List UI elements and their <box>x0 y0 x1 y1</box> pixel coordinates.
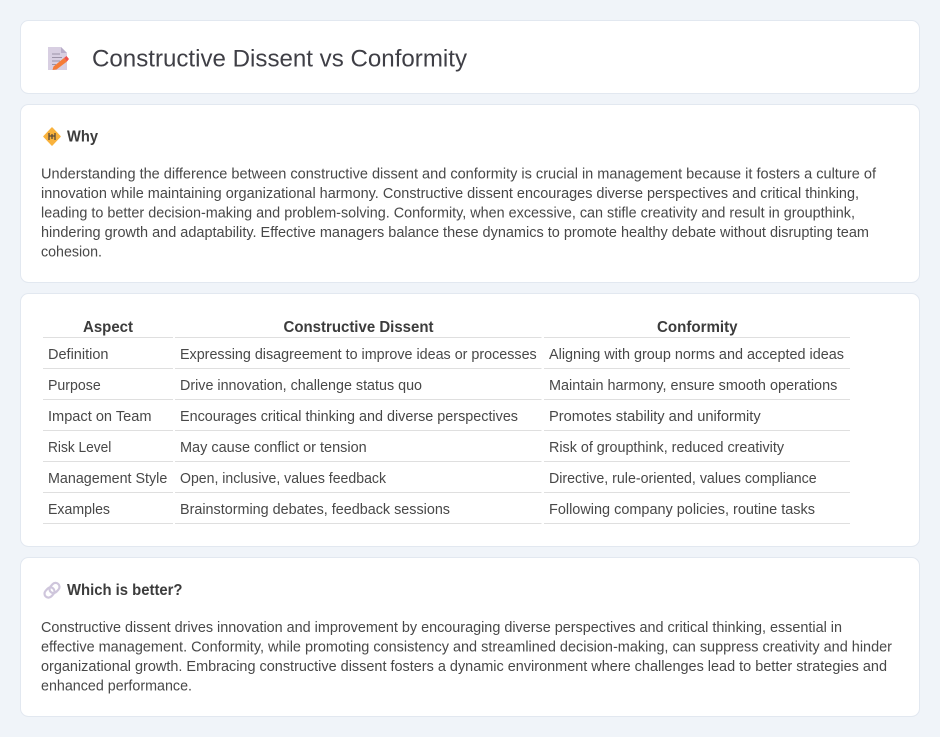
row: risk level <box>43 440 850 462</box>
row: impact on team: Impact on Team <box>48 409 152 425</box>
row: examples: Examples <box>48 502 110 518</box>
row: management style <box>43 471 850 492</box>
row: definition: Definition <box>48 347 108 363</box>
text block: why paragraph: hindering growth and adaptability. Effective managers balance these dynamics to promote healthy debate without disrupting team <box>41 225 869 241</box>
row: impact on team: Promotes stability and uniformity <box>549 409 762 425</box>
icon: warning diamond <box>44 128 60 145</box>
table header row: Conformity <box>657 319 738 336</box>
row: management style: Open, inclusive, values feedback <box>180 471 387 487</box>
text block: why paragraph: Understanding the difference between constructive dissent and conformity is crucial in management because it fosters a culture of <box>41 166 877 182</box>
panel: comparison table <box>20 294 920 546</box>
row: examples <box>43 502 850 524</box>
row: purpose <box>43 378 850 400</box>
title: Constructive Dissent vs Conformity <box>92 46 467 72</box>
table header row: Aspect <box>83 319 134 336</box>
row: purpose: Maintain harmony, ensure smooth operations <box>549 378 837 394</box>
row: impact on team: Encourages critical thinking and diverse perspectives <box>180 409 518 425</box>
row: impact on team <box>43 409 850 430</box>
text block: verdict paragraph: Constructive dissent drives innovation and improvement by encouraging diverse perspectives and critical thinking, essential in <box>41 620 842 636</box>
panel: which is better <box>20 558 920 716</box>
row: definition: Expressing disagreement to improve ideas or processes <box>180 347 537 363</box>
icon: document with pencil <box>48 47 69 70</box>
text block: verdict paragraph <box>41 620 892 694</box>
text block: verdict paragraph: effective management. Conformity, while promoting consistency and streamlined decision-making, can suppress creativity and hinder <box>41 640 892 656</box>
row: definition: Aligning with group norms and accepted ideas <box>549 347 844 363</box>
text block: why paragraph: innovation while maintaining organizational harmony. Constructive dissent encourages diverse perspectives and critical thinking, <box>41 186 859 202</box>
table header row <box>43 319 850 338</box>
row: definition <box>43 347 850 368</box>
row: examples: Brainstorming debates, feedback sessions <box>180 502 450 518</box>
row: risk level: Risk Level <box>48 440 111 456</box>
panel: why <box>20 104 920 282</box>
text block: verdict paragraph: enhanced performance. <box>41 678 192 694</box>
row: risk level: Risk of groupthink, reduced creativity <box>549 440 785 456</box>
icon: link <box>43 581 61 599</box>
heading: why: Why <box>67 129 98 146</box>
row: examples: Following company policies, routine tasks <box>549 502 815 518</box>
row: purpose: Purpose <box>48 378 101 394</box>
text block: verdict paragraph: organizational growth. Embracing constructive dissent fosters a dynamic environment where challenges lead to better strategies and <box>41 659 887 675</box>
text block: why paragraph: leading to better decision-making and problem-solving. Conformity, when excessive, can stifle creativity and result in groupthink, <box>41 206 855 222</box>
row: risk level: May cause conflict or tension <box>180 440 367 456</box>
table header row: Constructive Dissent <box>284 319 434 336</box>
panel: title card <box>20 20 920 94</box>
heading: which is better: Which is better? <box>67 582 182 599</box>
text block: why paragraph: cohesion. <box>41 244 102 260</box>
table: aspect comparison <box>43 319 850 524</box>
row: purpose: Drive innovation, challenge status quo <box>180 378 422 394</box>
text block: why paragraph <box>41 166 877 260</box>
row: management style: Directive, rule-oriented, values compliance <box>549 471 817 487</box>
row: management style: Management Style <box>48 471 167 487</box>
